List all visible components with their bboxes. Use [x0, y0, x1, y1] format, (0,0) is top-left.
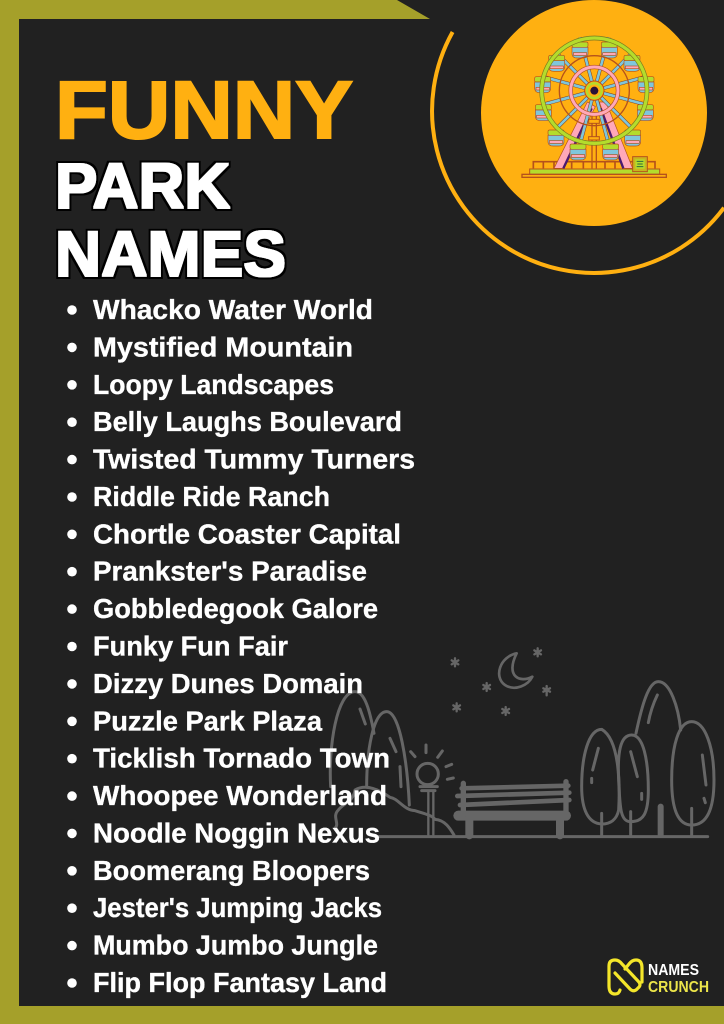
list items — [93, 294, 415, 998]
list items: Dizzy Dunes Domain — [93, 668, 363, 699]
list items: Riddle Ride Ranch — [93, 481, 330, 512]
list items: Mumbo Jumbo Jungle — [93, 930, 378, 961]
list items: Jester's Jumping Jacks — [93, 892, 382, 923]
bush — [335, 787, 454, 835]
list items: Whacko Water World — [93, 294, 373, 325]
title — [55, 65, 353, 290]
list items: Puzzle Park Plaza — [93, 705, 323, 736]
list items: Prankster's Paradise — [93, 556, 367, 587]
stars — [452, 648, 550, 715]
logo wordmark crunch: CRUNCH — [648, 979, 709, 996]
bench — [457, 782, 569, 835]
heading: park: PARK — [55, 150, 230, 222]
support legs — [554, 102, 633, 168]
moon — [499, 653, 532, 688]
orange arc ring — [432, 32, 724, 273]
illustration: night park outline — [330, 648, 714, 837]
bullets — [67, 305, 77, 988]
list items: Whoopee Wonderland — [93, 780, 387, 811]
wheel spokes — [543, 37, 646, 144]
list items: Boomerang Bloopers — [93, 855, 370, 886]
list items: Noodle Noggin Nexus — [93, 817, 380, 848]
lamp post — [411, 745, 453, 835]
list items: Flip Flop Fantasy Land — [93, 967, 387, 998]
ground and railing — [522, 162, 666, 177]
spoke highlights — [543, 37, 646, 144]
heading: funny: FUNNY — [55, 65, 353, 156]
list items: Twisted Tummy Turners — [93, 444, 415, 475]
list of park names — [67, 294, 415, 998]
heading: names: NAMES — [55, 218, 286, 290]
list items: Chortle Coaster Capital — [93, 518, 401, 549]
gondolas — [535, 42, 654, 160]
list items: Ticklish Tornado Town — [93, 743, 390, 774]
list items: Mystified Mountain — [93, 331, 353, 362]
logo mark — [609, 960, 642, 994]
ticket box — [633, 157, 647, 172]
list items: Funky Fun Fair — [93, 630, 288, 662]
logo wordmark names: NAMES — [648, 962, 699, 979]
wheel hub — [585, 81, 604, 100]
ground line — [377, 832, 708, 841]
list items: Loopy Landscapes — [93, 369, 334, 400]
list items: Gobbledegook Galore — [93, 593, 378, 624]
list items: Belly Laughs Boulevard — [93, 406, 402, 437]
orange circle — [481, 0, 707, 226]
left trees — [330, 692, 409, 805]
wheel rings — [542, 38, 647, 143]
logo: names crunch — [609, 960, 709, 996]
right trees — [582, 682, 714, 835]
icon: ferris wheel — [522, 37, 666, 177]
